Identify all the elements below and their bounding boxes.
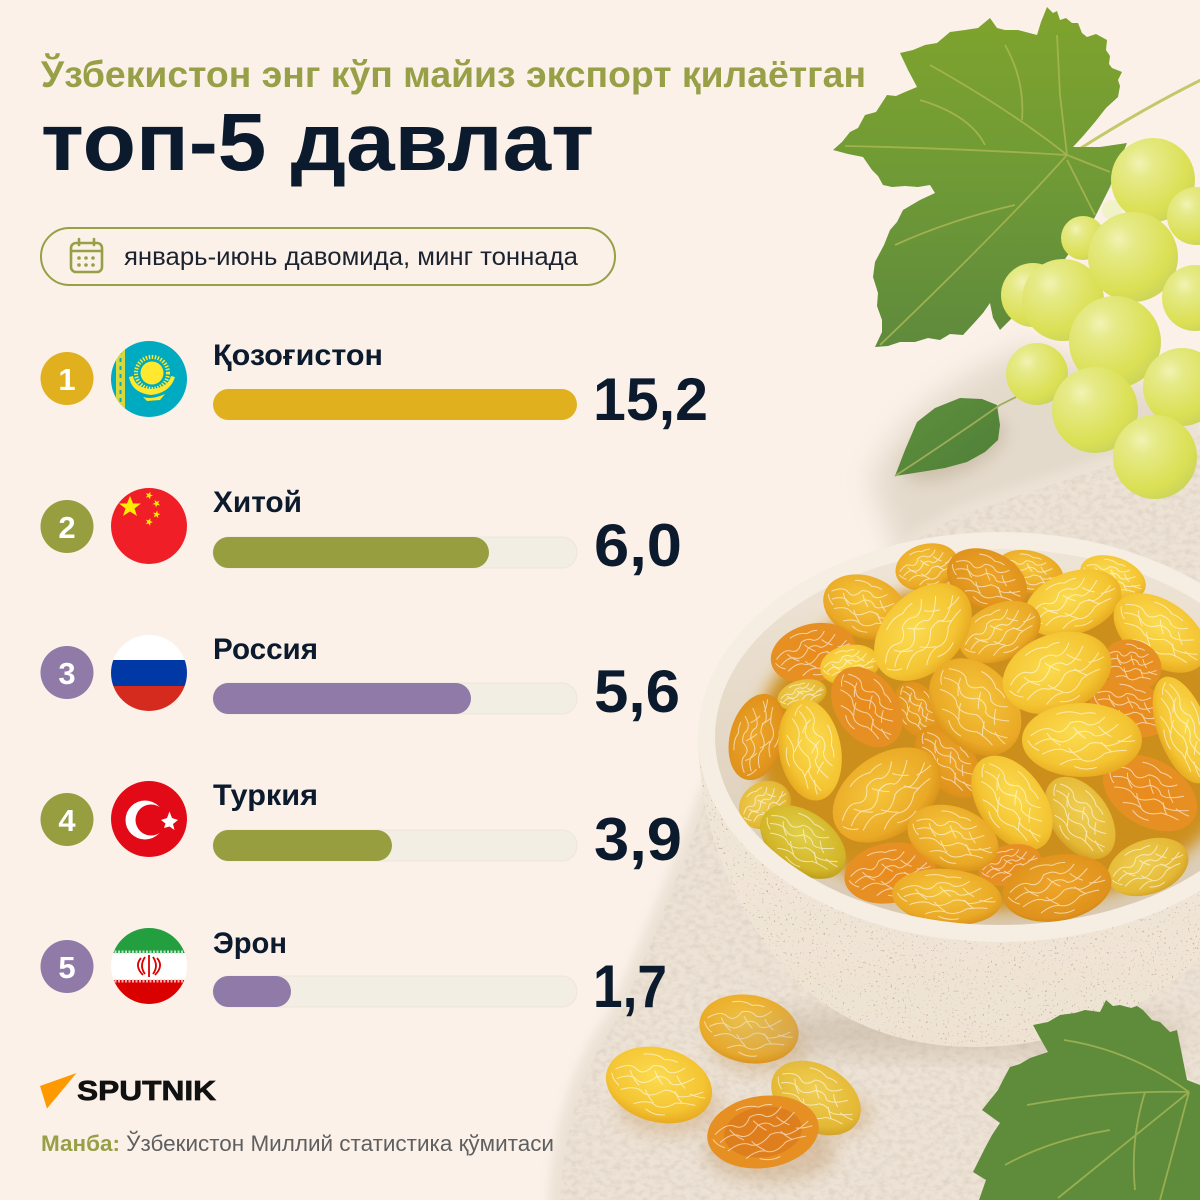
country name: Қозоғистон [213,339,383,372]
bar [213,683,577,714]
flag: Kazakhstan [111,341,187,417]
flag: China [111,488,187,564]
rank badge 4: 4 [58,803,76,838]
rank badge 2 [40,500,94,553]
photo: top vine leaf and stem [833,7,1200,347]
value: 15,2 [593,366,708,433]
rank badge 5: 5 [58,950,76,985]
photo: linen cloth [548,345,1200,1200]
bar [213,830,577,861]
row 1: Kazakhstan [40,339,708,433]
value: 5,6 [594,658,680,725]
pill text: январь-июнь давомида, минг тоннада [124,243,578,271]
flag: Russia [111,635,187,711]
photo: ceramic bowl [698,532,1200,1054]
row 4: Turkey [40,779,682,873]
period pill with calendar icon [41,228,615,285]
value: 6,0 [594,512,682,579]
title line 2: топ-5 давлат [41,97,594,188]
row 2: China [40,486,682,579]
flag: Iran [111,928,187,1004]
bar [213,976,577,1007]
rank badge 3 [40,646,94,699]
source line: Манба: Ўзбекистон Миллий статистика қўмитаси [41,1130,554,1156]
row 3: Russia [40,633,680,725]
row 5: Iran [40,927,667,1020]
country name: Хитой [213,486,302,519]
value: 3,9 [594,806,682,873]
photo: loose raisins [597,987,874,1182]
title line 1: Ўзбекистон энг кўп майиз экспорт қилаётган [40,53,866,95]
logo: Sputnik: SPUTNIK [77,1075,216,1106]
photo: raisins in the bowl [720,536,1200,930]
rank badge 3: 3 [58,656,76,691]
country name: Россия [213,633,318,666]
logo: Sputnik [40,1073,216,1108]
photo: small leaf [895,397,1016,495]
photo: green grape bunch [1001,138,1200,499]
country name: Туркия [213,779,318,812]
flag: Turkey [111,781,187,857]
bar [213,537,577,568]
country name: Эрон [213,927,287,960]
photo: bottom vine leaf [973,1000,1200,1200]
rank badge 5 [40,940,94,993]
rank badge 4 [40,793,94,846]
value: 1,7 [593,953,667,1020]
bar [213,389,577,420]
rank badge 1 [40,352,94,405]
rank badge 2: 2 [58,510,76,545]
rank badge 1: 1 [58,362,76,397]
icon: calendar [71,239,102,272]
